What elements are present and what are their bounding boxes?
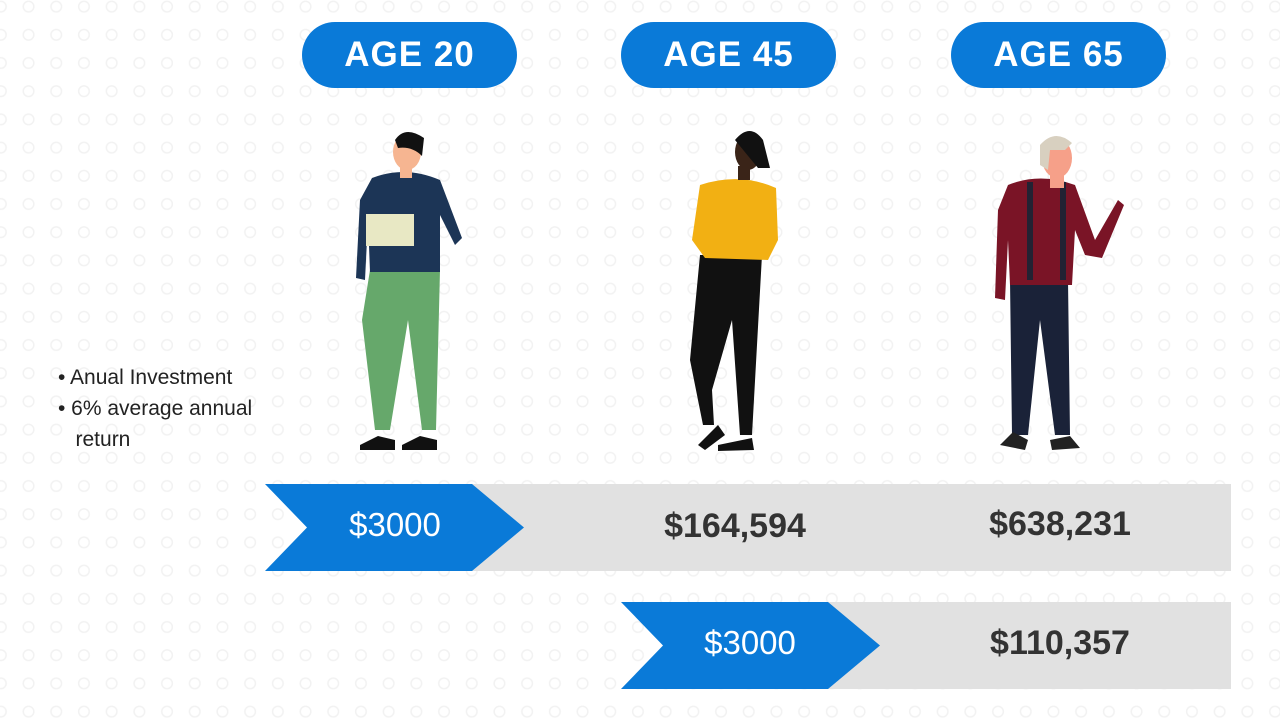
figure: old man (995, 136, 1124, 450)
value: $3000 row2: $3000 (704, 624, 796, 661)
pill: age 65 (951, 22, 1166, 88)
bar 1 (265, 484, 1231, 571)
value: $164,594: $164,594 (664, 507, 806, 545)
value: $3000 row1: $3000 (349, 506, 441, 543)
pill: age 20 (302, 22, 517, 88)
pill: age 65: AGE 65 (993, 35, 1124, 74)
value: $638,231: $638,231 (989, 505, 1131, 543)
bullet list: • Anual Investment (58, 366, 232, 389)
bullet list: return (76, 428, 130, 451)
bar 2 (621, 602, 1231, 689)
bullet list (58, 366, 252, 451)
bullet list: • 6% average annual (58, 397, 252, 420)
figure: young man (356, 132, 462, 450)
value: $110,357: $110,357 (990, 624, 1130, 662)
pill: age 20: AGE 20 (344, 35, 475, 74)
figure: woman (690, 131, 778, 451)
pill: age 45: AGE 45 (663, 35, 794, 74)
pill: age 45 (621, 22, 836, 88)
